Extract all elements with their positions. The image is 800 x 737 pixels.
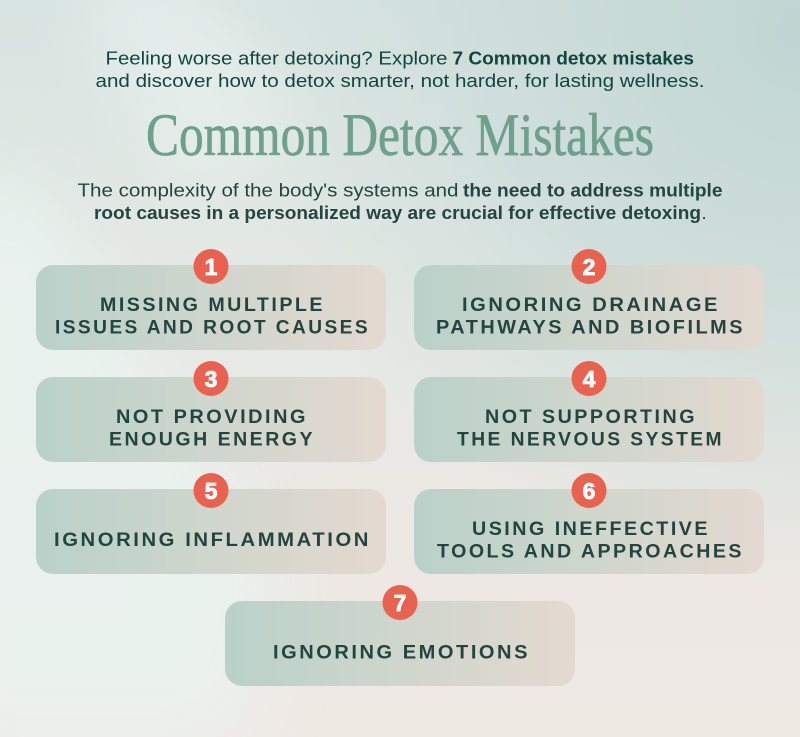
intro text: 7 Common detox mistakes — [452, 48, 694, 68]
card 2: IGNORING DRAINAGE — [462, 295, 720, 316]
badge 2: 2 — [583, 254, 595, 280]
card 6: USING INEFFECTIVE — [472, 519, 710, 540]
badge 6 — [572, 473, 606, 508]
badge 6: 6 — [583, 478, 595, 504]
description text: . — [702, 202, 707, 223]
badge 3 — [194, 361, 228, 396]
card 1: MISSING MULTIPLE — [100, 295, 325, 316]
description text: root causes in a personalized way are crucial for effective detoxing — [94, 202, 701, 223]
card 4 — [414, 361, 764, 462]
card 3: ENOUGH ENERGY — [109, 430, 315, 450]
card 3 — [36, 361, 386, 462]
card 5 — [36, 473, 386, 574]
badge 7 — [382, 585, 418, 620]
intro text: and discover how to detox smarter, not harder, for lasting wellness. — [96, 70, 704, 91]
card 7: IGNORING EMOTIONS — [273, 642, 530, 664]
badge 1 — [194, 249, 228, 284]
badge 5 — [194, 473, 228, 508]
description text: The complexity of the body's systems and — [78, 180, 458, 200]
intro text: Feeling worse after detoxing? Explore — [106, 48, 448, 68]
description text — [78, 180, 722, 223]
badge 1: 1 — [205, 254, 218, 280]
card 2 — [414, 249, 764, 350]
title: Common Detox Mistakes — [146, 102, 654, 168]
card 4: THE NERVOUS SYSTEM — [457, 430, 724, 450]
card 3: NOT PROVIDING — [116, 407, 308, 428]
card 7 — [225, 585, 575, 686]
card 6: TOOLS AND APPROACHES — [437, 542, 744, 562]
card 1: ISSUES AND ROOT CAUSES — [55, 318, 370, 338]
badge 5: 5 — [205, 478, 218, 504]
badge 7: 7 — [394, 590, 406, 616]
card 2: PATHWAYS AND BIOFILMS — [436, 318, 745, 338]
card 5: IGNORING INFLAMMATION — [54, 530, 371, 551]
card 6 — [414, 473, 764, 574]
badge 4 — [572, 361, 606, 396]
badge 4: 4 — [583, 366, 596, 392]
card 1 — [36, 249, 386, 350]
badge 2 — [572, 249, 606, 284]
description text: the need to address multiple — [463, 180, 722, 200]
intro text — [96, 48, 704, 91]
badge 3: 3 — [205, 366, 217, 392]
card 4: NOT SUPPORTING — [485, 407, 697, 428]
